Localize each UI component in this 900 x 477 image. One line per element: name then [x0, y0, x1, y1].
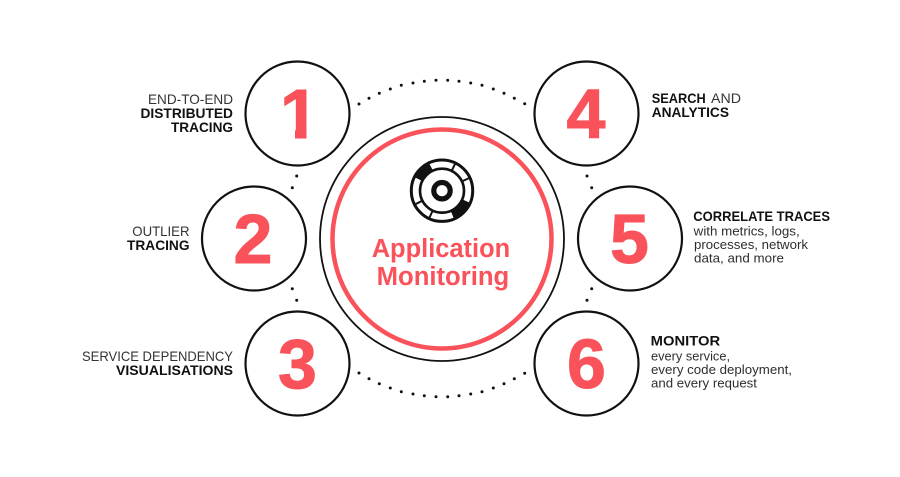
node 1: [246, 62, 350, 166]
label 5: correlate traces: with metrics, logs,: [693, 224, 800, 239]
top dotted arc: [358, 79, 526, 106]
label 5: correlate traces: processes, network: [694, 237, 809, 252]
label 1: end-to-end distributed tracing: [140, 92, 233, 135]
label 5: correlate traces: data, and more: [694, 250, 784, 265]
label 2: outlier tracing: OUTLIER: [132, 224, 190, 239]
node 2: 2: [234, 200, 272, 278]
node 5: [578, 186, 682, 290]
label 5: correlate traces: CORRELATE TRACES: [693, 209, 830, 224]
label 2: outlier tracing: TRACING: [127, 238, 190, 253]
node 4: [534, 62, 638, 166]
label 1: end-to-end distributed tracing: DISTRIBUTED: [140, 106, 233, 121]
label 5: correlate traces: [693, 209, 830, 265]
label 4: search and analytics: ANALYTICS: [652, 105, 729, 120]
label 2: outlier tracing: [127, 224, 190, 253]
node 6: [534, 312, 638, 416]
label 6: monitor: every service,: [651, 348, 730, 364]
label 1: end-to-end distributed tracing: TRACING: [171, 120, 233, 135]
label 4: search and analytics: [652, 91, 741, 120]
node 6: 6: [567, 325, 606, 403]
label 6: monitor: [651, 334, 792, 390]
right dotted connectors: [586, 174, 593, 302]
left dotted connectors: [291, 174, 298, 302]
label 1: end-to-end distributed tracing: END-TO-END: [148, 92, 233, 107]
central hub: [320, 117, 564, 361]
hub title: [372, 235, 510, 291]
node 3: 3: [278, 325, 317, 403]
node 5: 5: [610, 200, 649, 278]
outer black ring: [320, 117, 564, 361]
label 4: search and analytics: AND: [711, 91, 741, 106]
bottom dotted arc: [358, 372, 526, 398]
label 6: monitor: MONITOR: [651, 334, 720, 348]
hub title: Monitoring: [377, 263, 509, 291]
icon: monitoring dial: [406, 155, 478, 227]
label 3: service dependency visualisations: VISUALISATIONS: [116, 363, 233, 378]
label 6: monitor: every code deployment,: [651, 362, 792, 377]
hub title: Application: [372, 235, 510, 263]
label 4: search and analytics: SEARCH: [652, 91, 706, 106]
label 3: service dependency visualisations: [82, 349, 233, 378]
label 6: monitor: and every request: [651, 375, 757, 390]
node 1: 1: [280, 75, 319, 153]
node 2: [202, 186, 306, 290]
infographic: application monitoring: [82, 60, 830, 417]
label 3: service dependency visualisations: SERVICE DEPENDENCY: [82, 349, 233, 364]
node 4: 4: [567, 75, 606, 153]
node 3: [246, 312, 350, 416]
inner red ring: [332, 130, 552, 348]
